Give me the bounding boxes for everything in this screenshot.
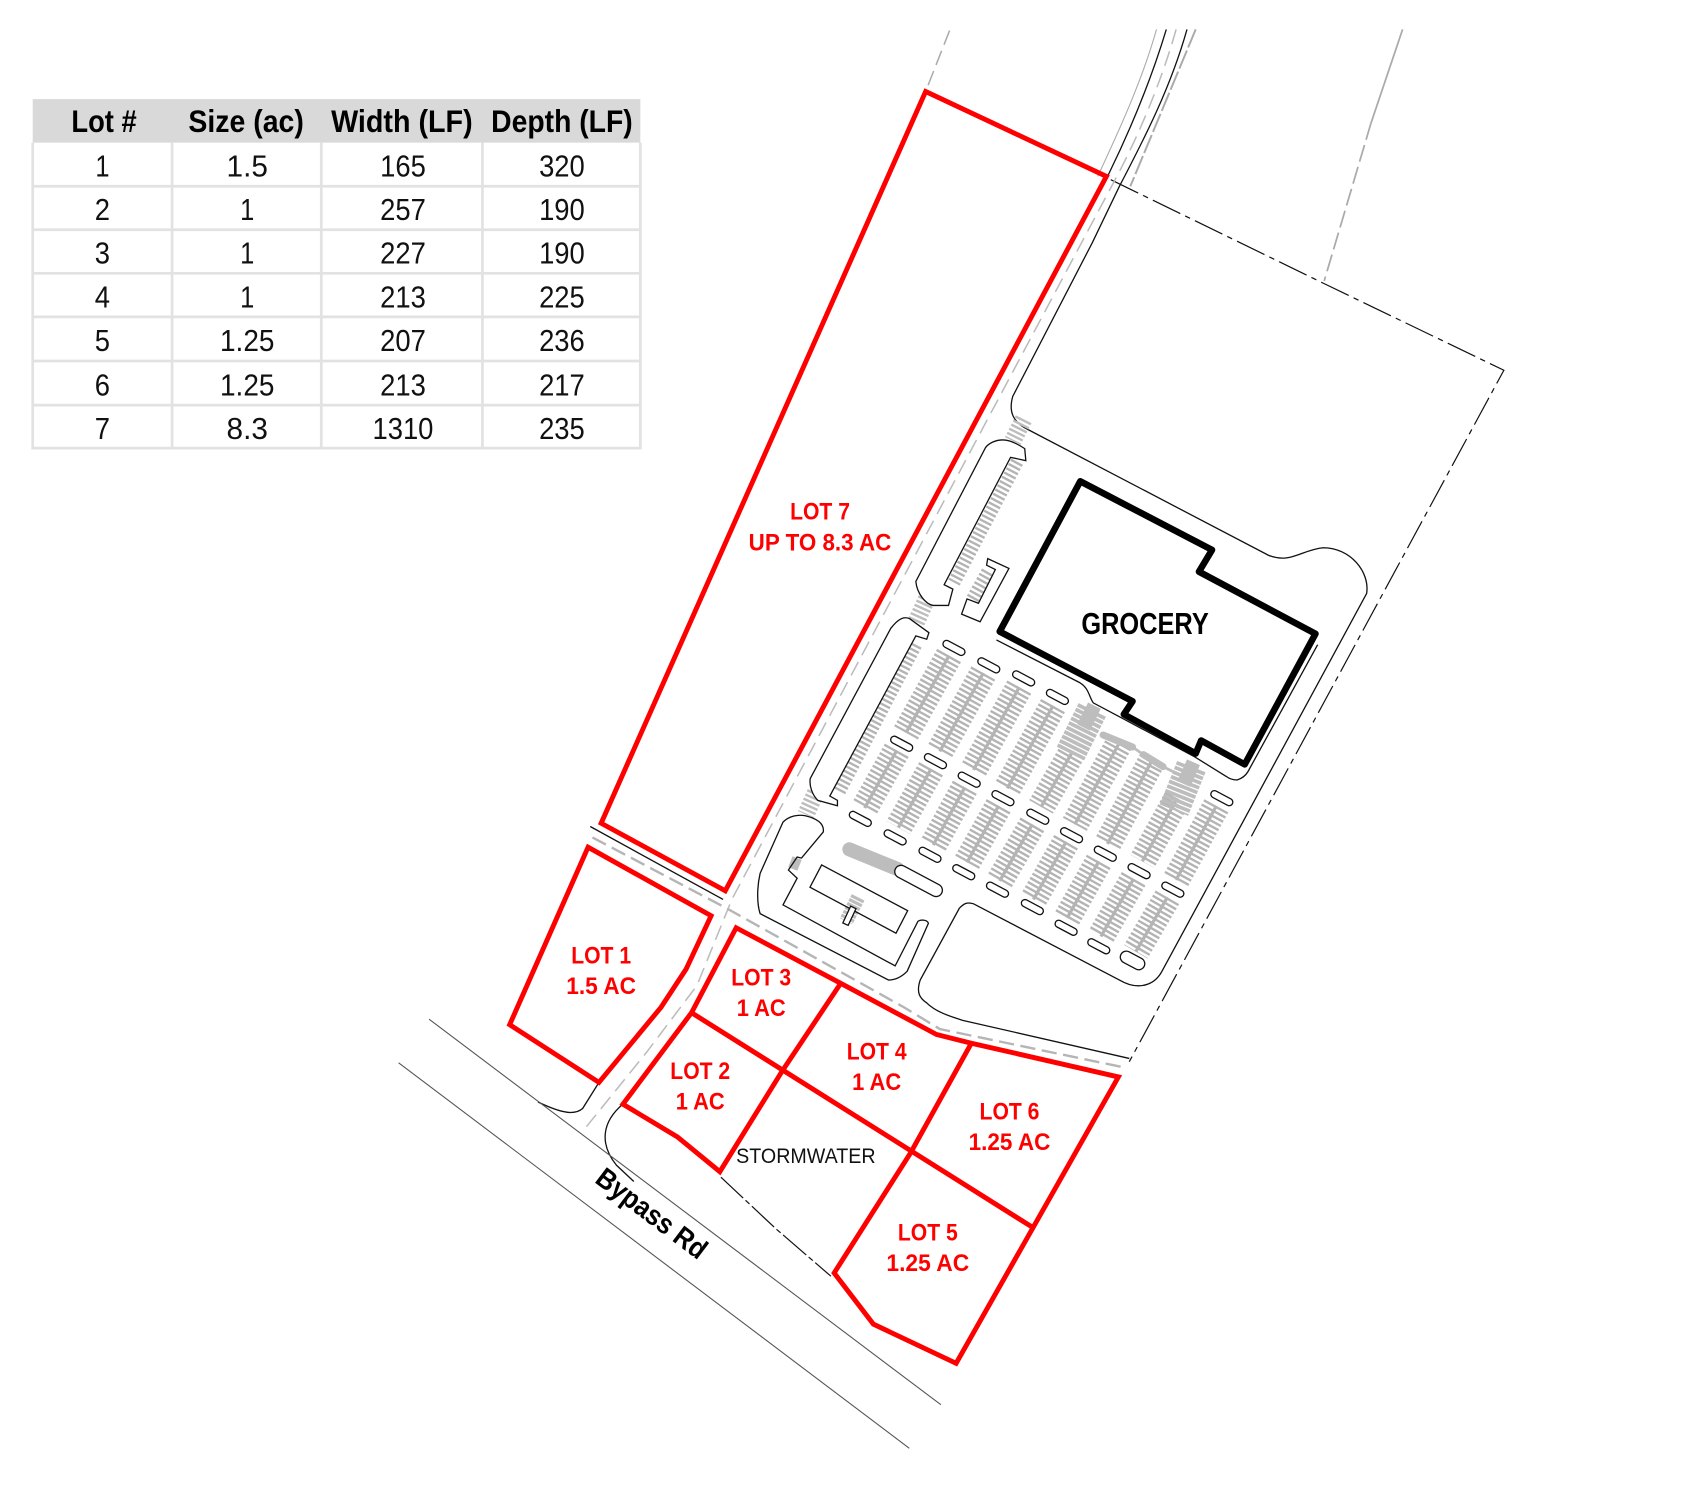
label: lot 5: LOT 5 bbox=[898, 1219, 958, 1246]
lot table: 257 bbox=[380, 193, 426, 227]
label: lot 7 bbox=[749, 498, 891, 556]
lot table: 1 bbox=[95, 149, 109, 183]
lot table: 217 bbox=[539, 368, 585, 402]
road lines bbox=[538, 29, 1367, 1181]
lot table: 1 bbox=[240, 193, 254, 227]
lot table: 320 bbox=[539, 149, 585, 183]
lot table: 4 bbox=[95, 281, 110, 315]
grocery label: GROCERY bbox=[1081, 607, 1209, 641]
lot table: 6 bbox=[95, 368, 110, 402]
label: lot 6: 1.25 AC bbox=[969, 1129, 1050, 1156]
crosswalks and gray walkways bbox=[793, 419, 1194, 921]
lot table: 7 bbox=[95, 412, 110, 446]
lot table: 190 bbox=[539, 193, 585, 227]
parking stall rows bbox=[839, 462, 1216, 952]
label: lot 2: 1 AC bbox=[676, 1089, 725, 1116]
landscape islands bbox=[758, 440, 1026, 980]
label: lot 4 bbox=[847, 1039, 907, 1096]
label: lot 7: LOT 7 bbox=[790, 498, 850, 525]
grocery building bbox=[1000, 481, 1315, 764]
label: lot 3: 1 AC bbox=[737, 995, 786, 1022]
lot table: 225 bbox=[539, 281, 585, 315]
lot table: Width (LF) bbox=[331, 103, 473, 139]
label: lot 6 bbox=[969, 1098, 1050, 1156]
outparcel building bbox=[810, 865, 908, 933]
lot table: 1 bbox=[240, 281, 254, 315]
lot table: Depth (LF) bbox=[491, 103, 633, 139]
lot table: Lot # bbox=[71, 103, 137, 139]
lot table: 1.25 bbox=[220, 368, 274, 402]
small parking pills bbox=[843, 639, 1234, 972]
label: lot 2 bbox=[670, 1058, 730, 1116]
lot table: 213 bbox=[380, 368, 426, 402]
lot table: 1.25 bbox=[220, 324, 274, 358]
lot table bbox=[33, 99, 640, 448]
lot table: 3 bbox=[95, 237, 110, 271]
label: lot 1: 1.5 AC bbox=[566, 973, 636, 1000]
label: lot 2: LOT 2 bbox=[670, 1058, 730, 1085]
lot table: 2 bbox=[95, 193, 110, 227]
label: lot 4: LOT 4 bbox=[847, 1039, 907, 1066]
walkway line around building bbox=[996, 640, 1318, 780]
property and easement lines bbox=[510, 29, 1504, 1363]
lot table: 8.3 bbox=[227, 412, 268, 446]
lot table: 165 bbox=[380, 149, 426, 183]
bypass road edges bbox=[399, 1019, 941, 1448]
label: lot 1: LOT 1 bbox=[571, 943, 631, 970]
lot table: 1 bbox=[240, 237, 254, 271]
label: lot 3 bbox=[731, 964, 791, 1022]
label: lot 1 bbox=[566, 943, 636, 1000]
lot table: Size (ac) bbox=[188, 103, 304, 139]
lot boundaries bbox=[510, 91, 1118, 1363]
label: lot 6: LOT 6 bbox=[980, 1098, 1039, 1125]
label: lot 3: LOT 3 bbox=[731, 964, 791, 991]
lot table: 213 bbox=[380, 281, 426, 315]
lot table: 190 bbox=[539, 237, 585, 271]
lot table: 1.5 bbox=[227, 149, 268, 183]
label: lot 7: UP TO 8.3 AC bbox=[749, 529, 891, 556]
label: lot 5 bbox=[886, 1219, 969, 1277]
label: bypass road: Bypass Rd bbox=[590, 1161, 714, 1265]
lot table: 5 bbox=[95, 324, 110, 358]
label: stormwater: STORMWATER bbox=[736, 1145, 876, 1168]
lot table: 207 bbox=[380, 324, 426, 358]
lot table: 236 bbox=[539, 324, 585, 358]
label: lot 4: 1 AC bbox=[852, 1069, 901, 1096]
label: lot 5: 1.25 AC bbox=[886, 1250, 969, 1277]
lot table: 235 bbox=[539, 412, 585, 446]
lot table: 227 bbox=[380, 237, 426, 271]
lot table: 1310 bbox=[372, 412, 433, 446]
